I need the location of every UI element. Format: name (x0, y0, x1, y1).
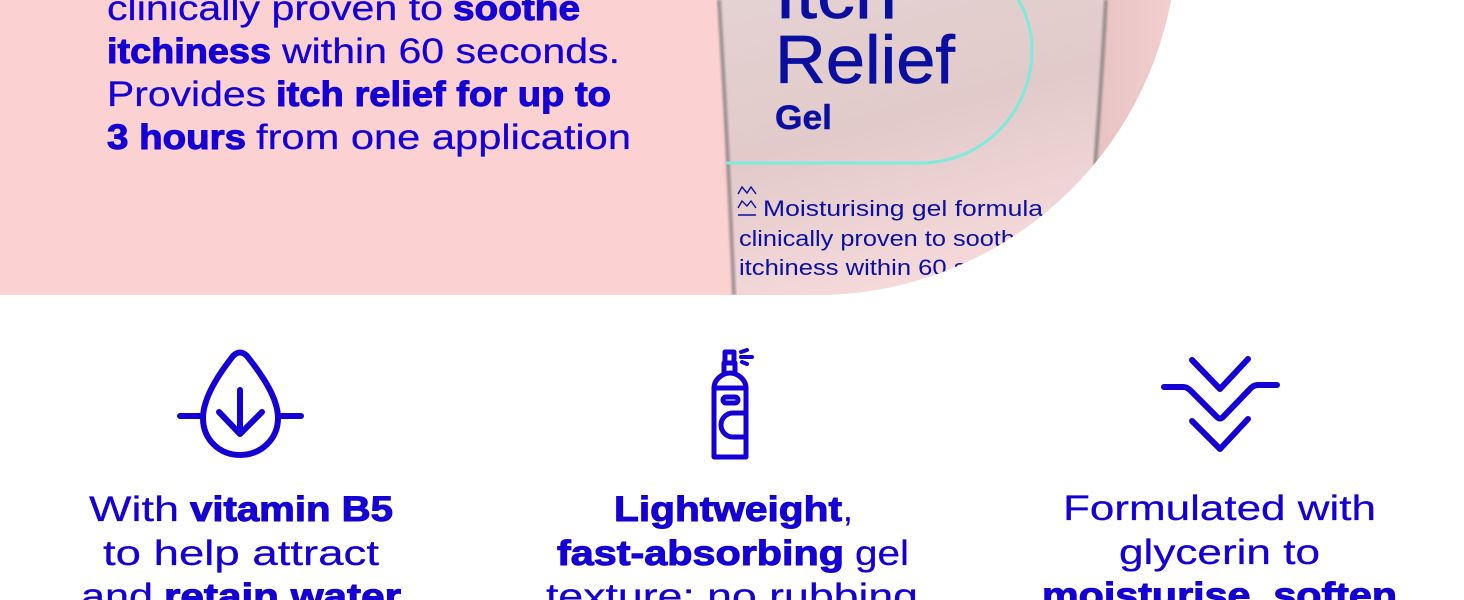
hero text: within 60 seconds. (281, 32, 620, 71)
product tube (718, 0, 1108, 295)
benefit: lightweight (546, 490, 918, 600)
product name: Relief (775, 22, 955, 98)
benefit: glycerin: Formulated with (1063, 489, 1376, 528)
product name: Gel (775, 99, 832, 137)
benefit: glycerin (1042, 489, 1397, 600)
icon: tube waves (738, 187, 756, 215)
benefit: lightweight: , (843, 490, 853, 529)
hero text: itchiness (107, 32, 271, 71)
mint label outline (726, 0, 1032, 163)
tube description (740, 200, 1043, 275)
benefit: lightweight: gel (855, 534, 909, 573)
benefit: vitamin B5: vitamin B5 (190, 490, 393, 529)
panel: pink hero (0, 0, 1171, 295)
tube description: Moisturising gel formula (763, 196, 1044, 221)
product name (775, 0, 955, 137)
icon: water drop with arrow (180, 352, 301, 455)
hero text: from one application (256, 118, 631, 157)
icon: spray bottle (714, 350, 752, 457)
hero text (107, 0, 631, 157)
benefit: vitamin B5 (81, 490, 401, 600)
benefit: lightweight: fast-absorbing (557, 534, 844, 573)
hero text: Provides (107, 75, 266, 114)
hero text: 3 hours (107, 118, 246, 157)
benefit: vitamin B5: With (89, 490, 179, 529)
tube description: clinically proven to soothe (739, 226, 1029, 251)
tube shadow area (1091, 0, 1171, 168)
icon: chevrons down (1164, 359, 1277, 449)
benefit: vitamin B5: to help attract (103, 534, 379, 573)
benefit: lightweight: Lightweight (614, 490, 842, 529)
hero text: itch relief for up to (276, 75, 611, 114)
tube description: itchiness within 60 seconds (739, 255, 1049, 280)
benefit: glycerin: glycerin to (1119, 533, 1320, 572)
